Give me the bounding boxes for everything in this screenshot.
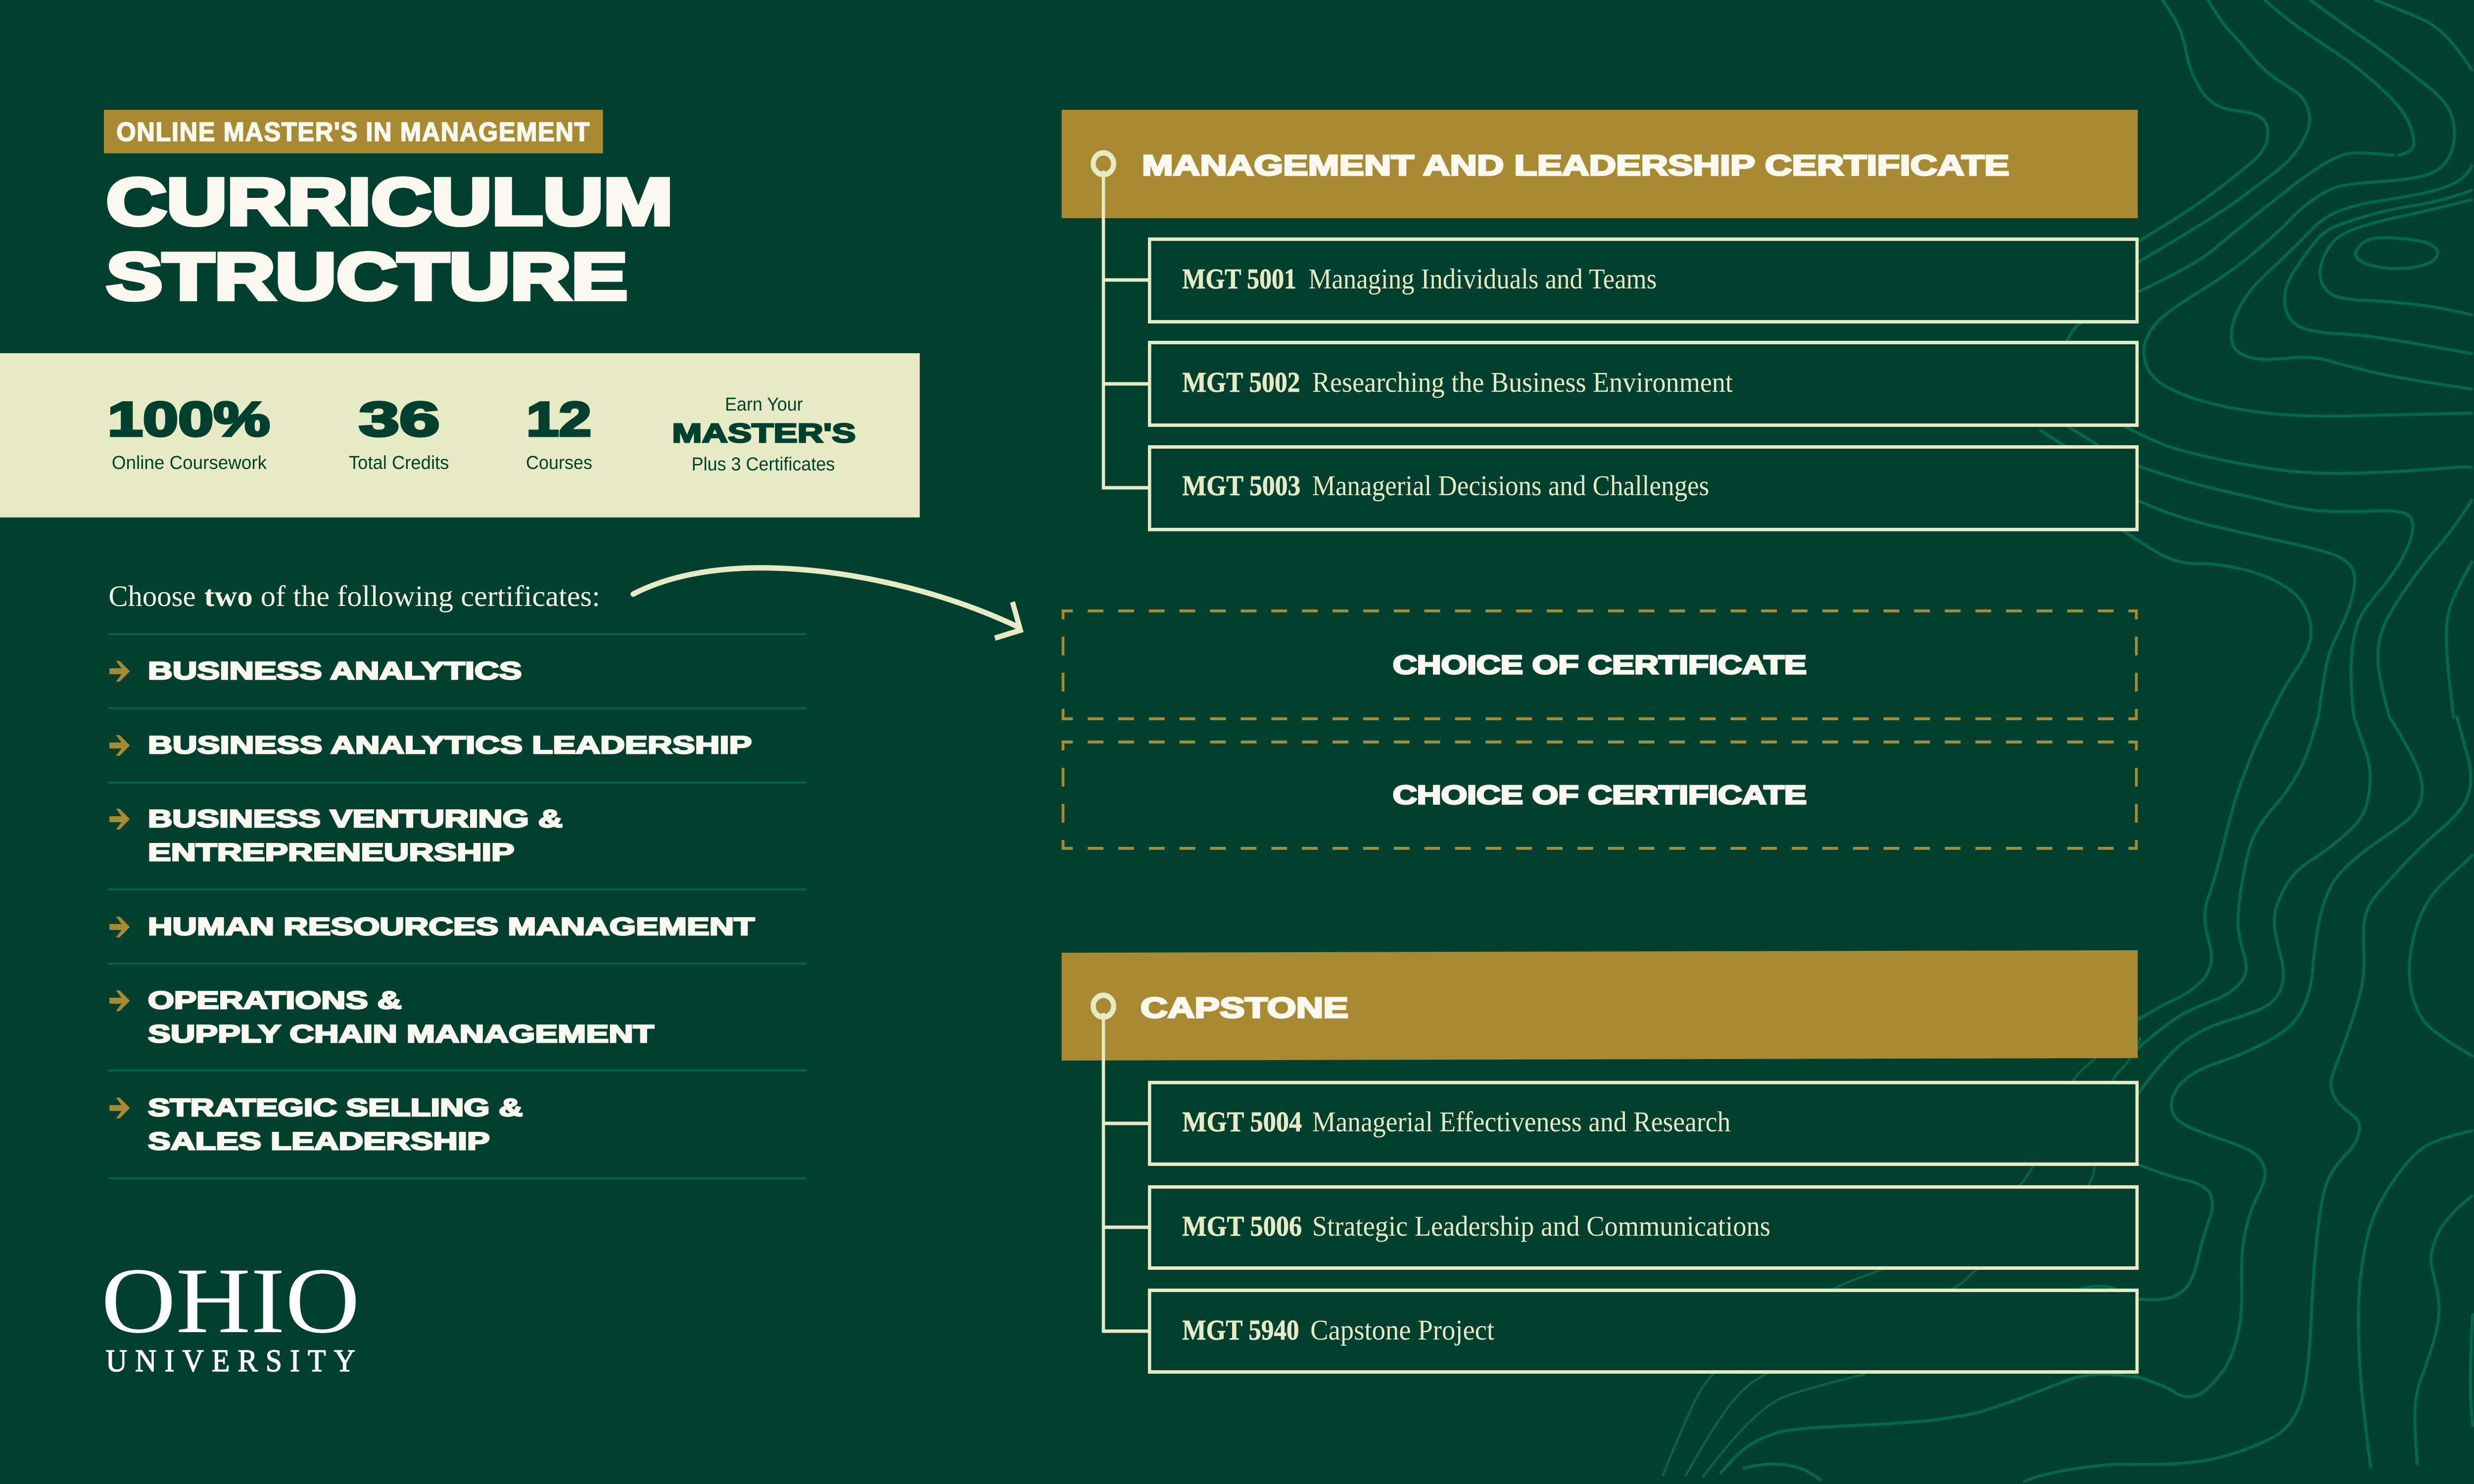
panel: certificate list	[108, 634, 806, 1178]
list item: strategic selling and sales leadership	[109, 1094, 523, 1155]
course: MGT 5006	[1149, 1187, 2137, 1268]
list item: business venturing and entrepreneurship: BUSINESS VENTURING &	[148, 805, 563, 833]
stat: 36 total credits: 36	[359, 392, 440, 446]
course: MGT 5003	[1149, 447, 2137, 529]
course: MGT 5001: MGT 5001	[1182, 263, 1296, 295]
connector tree with node	[1093, 995, 1149, 1331]
header: capstone: CAPSTONE	[1141, 992, 1348, 1024]
text: choose two of the following certificates: of the following certificates:	[261, 580, 600, 612]
list item: business analytics	[109, 657, 522, 685]
list item: business analytics leadership: BUSINESS ANALYTICS LEADERSHIP	[148, 731, 752, 759]
list item: business venturing and entrepreneurship: ENTREPRENEURSHIP	[148, 838, 515, 866]
connector tree with node	[1093, 153, 1149, 488]
header: capstone	[1062, 950, 2138, 1061]
course: MGT 5940	[1149, 1290, 2137, 1372]
course: MGT 5002: Researching the Business Environment	[1312, 366, 1733, 398]
stat: earn your master's plus 3 certificates: Plus 3 Certificates	[692, 454, 835, 475]
course: MGT 5940: MGT 5940	[1182, 1314, 1299, 1346]
stat: 12 courses: 12	[526, 392, 591, 446]
logo: Ohio University: OHIO	[101, 1249, 360, 1353]
text: choose two of the following certificates: two	[204, 580, 253, 612]
list item: operations and supply chain management: OPERATIONS &	[148, 986, 402, 1014]
list item: human resources management	[109, 913, 755, 940]
panel: capstone	[1062, 950, 2138, 1372]
course: MGT 5004: Managerial Effectiveness and Research	[1312, 1106, 1730, 1138]
course: MGT 5004: MGT 5004	[1182, 1106, 1302, 1138]
list item: strategic selling and sales leadership: STRATEGIC SELLING &	[148, 1094, 523, 1121]
list item: business analytics: BUSINESS ANALYTICS	[148, 657, 522, 685]
badge: online master's in management	[104, 110, 603, 153]
stat: 12 courses	[526, 392, 592, 473]
panel: stats band	[0, 353, 920, 517]
stat: 36 total credits	[349, 392, 449, 473]
list item: operations and supply chain management: SUPPLY CHAIN MANAGEMENT	[148, 1020, 654, 1048]
stat: 36 total credits: Total Credits	[349, 453, 449, 473]
badge: online master's in management: ONLINE MASTER'S IN MANAGEMENT	[116, 117, 589, 147]
list item: strategic selling and sales leadership: SALES LEADERSHIP	[148, 1127, 490, 1155]
title: CURRICULUM	[106, 165, 673, 239]
course: MGT 5006: MGT 5006	[1182, 1210, 1302, 1242]
course: MGT 5002: MGT 5002	[1182, 366, 1300, 398]
logo: Ohio University	[101, 1249, 360, 1378]
course: MGT 5006: Strategic Leadership and Communications	[1312, 1210, 1770, 1242]
list item: business venturing and entrepreneurship	[109, 805, 563, 866]
stat: earn your master's plus 3 certificates: MASTER'S	[672, 418, 856, 448]
choice of certificate slot 1: CHOICE OF CERTIFICATE	[1393, 650, 1807, 680]
logo: Ohio University: UNIVERSITY	[106, 1343, 355, 1378]
list item: operations and supply chain management	[109, 986, 654, 1048]
contour line pattern	[1663, 0, 2473, 1482]
choice of certificate slot 2: CHOICE OF CERTIFICATE	[1393, 781, 1807, 810]
stat: 100% online coursework	[107, 392, 270, 473]
header: management and leadership certificate	[1062, 110, 2138, 218]
course: MGT 5001: Managing Individuals and Teams	[1308, 263, 1657, 295]
title	[106, 165, 673, 314]
course: MGT 5004	[1149, 1082, 2137, 1164]
stat: 100% online coursework: 100%	[107, 392, 270, 446]
stat: 100% online coursework: Online Coursework	[112, 453, 267, 473]
course: MGT 5003: MGT 5003	[1182, 469, 1300, 502]
list item: business analytics leadership	[109, 731, 752, 759]
text: choose two of the following certificates: Choose	[108, 580, 196, 612]
course: MGT 5940: Capstone Project	[1310, 1314, 1494, 1346]
arrow: choice pointer	[633, 568, 1020, 638]
course: MGT 5002	[1149, 342, 2137, 425]
stat: earn your master's plus 3 certificates: Earn Your	[725, 394, 803, 415]
course: MGT 5003: Managerial Decisions and Challenges	[1312, 469, 1709, 502]
course: MGT 5001	[1149, 239, 2137, 322]
stat: earn your master's plus 3 certificates	[672, 394, 856, 475]
header: management and leadership certificate: MANAGEMENT AND LEADERSHIP CERTIFICATE	[1142, 149, 2009, 182]
panel: management and leadership certificate	[1062, 110, 2138, 529]
stat: 12 courses: Courses	[526, 453, 592, 473]
title: STRUCTURE	[106, 240, 627, 314]
list item: human resources management: HUMAN RESOURCES MANAGEMENT	[148, 913, 755, 940]
